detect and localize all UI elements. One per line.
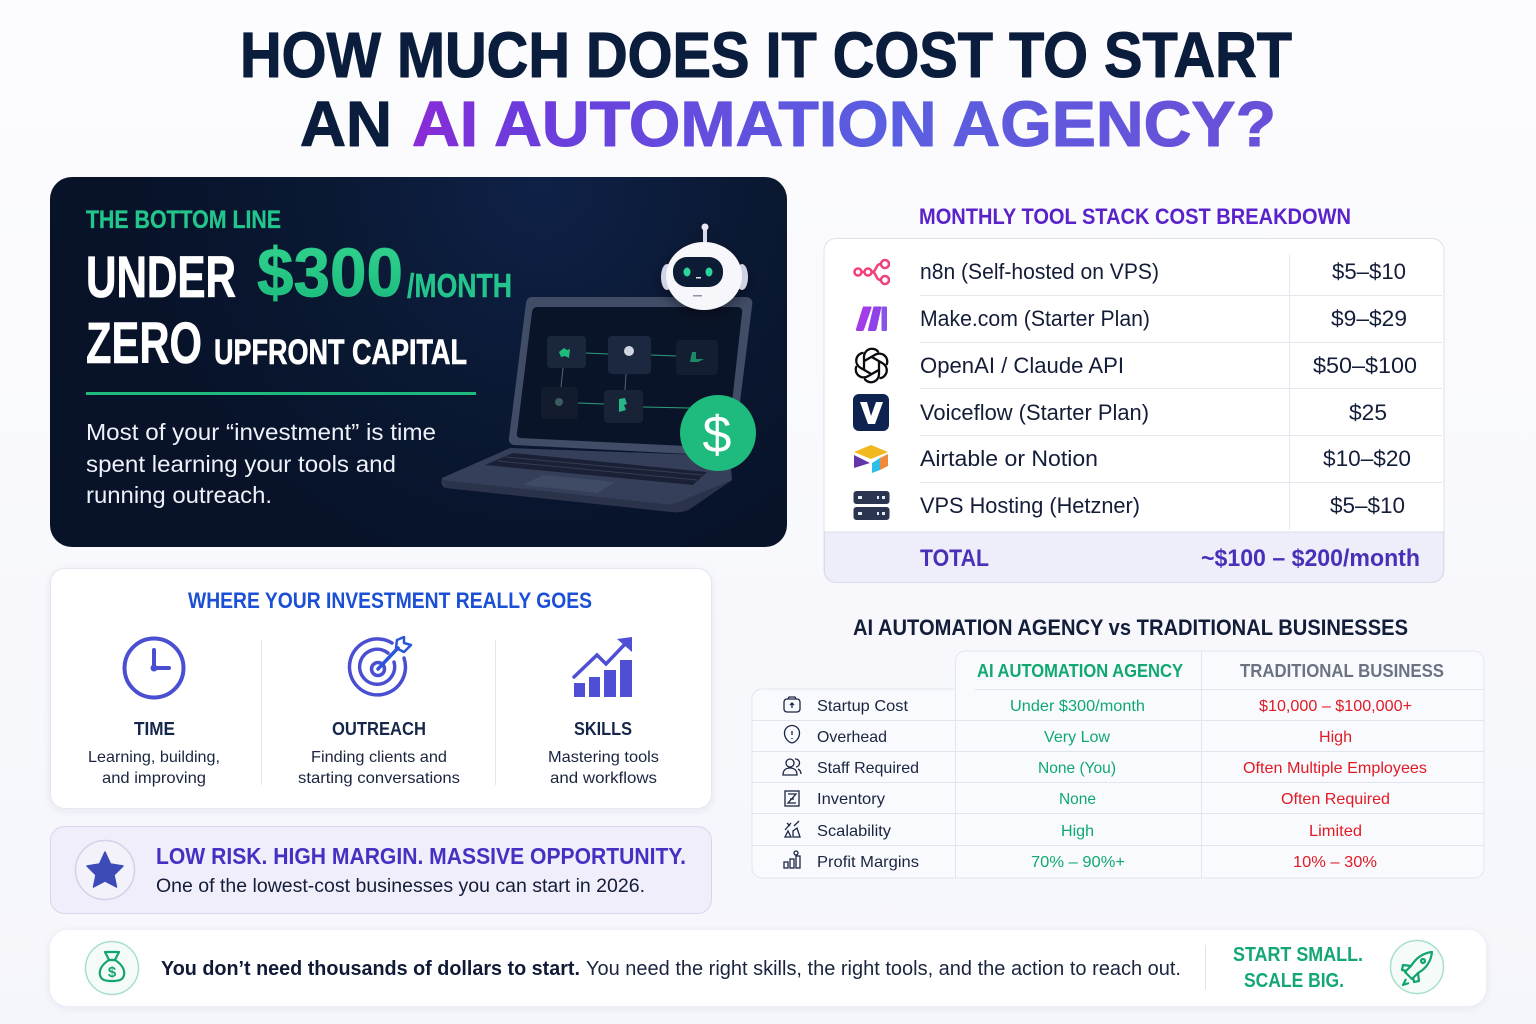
agency values: Under $300/month: [1010, 698, 1145, 715]
column headers: AI AUTOMATION AGENCY: [977, 661, 1183, 681]
column: outreach: Finding clients and: [311, 749, 447, 766]
footer message: You don’t need thousands of dollars to start.: [161, 958, 580, 980]
row: voiceflow: Voiceflow (Starter Plan): [920, 400, 1149, 425]
icon: make: [856, 306, 887, 331]
banner subtext: One of the lowest-cost businesses you can start in 2026.: [156, 876, 645, 897]
traditional values: Often Required: [1281, 791, 1390, 808]
icon: voiceflow: [853, 394, 889, 431]
headline: under $300 per month: $300: [257, 234, 403, 311]
column: skills: [548, 719, 659, 787]
footer tagline: START SMALL.: [1233, 944, 1363, 966]
panel: where your investment really goes: [50, 568, 712, 808]
title: AN: [300, 88, 392, 160]
row: total: [920, 545, 1420, 572]
icon: rocket: [1390, 940, 1444, 994]
row: voiceflow: $25: [1349, 400, 1387, 425]
row: openai: [920, 353, 1417, 378]
headline: under $300 per month: [86, 234, 512, 311]
row: openai: OpenAI / Claude API: [920, 353, 1124, 378]
row: n8n: n8n (Self-hosted on VPS): [920, 259, 1159, 284]
banner heading: LOW RISK. HIGH MARGIN. MASSIVE OPPORTUNITY.: [156, 843, 686, 869]
heading: comparison: AI AUTOMATION AGENCY vs TRADITIONAL BUSINESSES: [853, 615, 1408, 640]
illustration: laptop: [442, 297, 752, 512]
row: voiceflow: [920, 400, 1387, 425]
agency values: 70% – 90%+: [1031, 854, 1125, 871]
title: HOW MUCH DOES IT COST TO START: [240, 19, 1292, 91]
panel: comparison table: [752, 651, 1484, 878]
column: skills: SKILLS: [574, 719, 632, 739]
panel: low risk banner: [50, 826, 712, 914]
row: vps hosting: VPS Hosting (Hetzner): [920, 493, 1140, 518]
footer tagline: [1233, 944, 1363, 992]
row labels: Scalability: [817, 823, 891, 840]
traditional values: High: [1319, 729, 1352, 746]
traditional values: Limited: [1309, 823, 1362, 840]
icon: money bag: [86, 942, 138, 994]
icon: openai: [853, 349, 890, 382]
headline: under $300 per month: /MONTH: [407, 267, 512, 304]
footer message: [161, 958, 1181, 980]
footer message: You need the right skills, the right tools, and the action to reach out.: [586, 958, 1181, 980]
column headers: [977, 661, 1444, 681]
icon: target: [349, 637, 411, 695]
heading: the bottom line: THE BOTTOM LINE: [86, 206, 281, 234]
panel: tool stack table: [824, 238, 1444, 582]
row labels: [817, 698, 919, 871]
icon: airtable: [854, 445, 888, 473]
row: n8n: $5–$10: [1332, 259, 1406, 284]
panel: the bottom line: [50, 177, 787, 547]
comparison row icons: [783, 697, 801, 868]
row: make.com: Make.com (Starter Plan): [920, 306, 1150, 331]
row: n8n: [920, 259, 1406, 284]
row: make.com: $9–$29: [1331, 306, 1407, 331]
column: outreach: [298, 719, 460, 787]
row: openai: $50–$100: [1313, 353, 1417, 378]
column: time: Learning, building,: [88, 749, 220, 766]
icon: robot: [661, 224, 748, 310]
row labels: Profit Margins: [817, 854, 919, 871]
icon: clock: [124, 638, 184, 698]
column: time: and improving: [102, 770, 206, 787]
agency values: [1010, 698, 1145, 871]
row: vps hosting: [920, 493, 1405, 518]
icon: money bag: $: [108, 964, 117, 981]
traditional values: 10% – 30%: [1293, 854, 1377, 871]
column headers: TRADITIONAL BUSINESS: [1240, 661, 1444, 681]
row labels: Staff Required: [817, 760, 919, 777]
row: total: TOTAL: [920, 545, 989, 572]
row: airtable: $10–$20: [1323, 446, 1411, 471]
headline: zero upfront capital: [86, 311, 467, 376]
description text: spent learning your tools and: [86, 451, 396, 477]
workflow nodes on screen: [541, 336, 718, 423]
row: total: ~$100 – $200/month: [1201, 545, 1420, 572]
row labels: Inventory: [817, 791, 885, 808]
row: make.com: [920, 306, 1407, 331]
traditional values: [1243, 698, 1427, 871]
title: AI AUTOMATION AGENCY?: [412, 88, 1276, 160]
agency values: High: [1061, 823, 1094, 840]
row labels: Startup Cost: [817, 698, 909, 715]
traditional values: Often Multiple Employees: [1243, 760, 1427, 777]
icon: n8n: [854, 260, 889, 284]
title: [240, 19, 1292, 160]
icon: star: [76, 840, 134, 900]
column: skills: Mastering tools: [548, 749, 659, 766]
column: outreach: starting conversations: [298, 770, 460, 787]
icon: server: [854, 491, 890, 520]
heading: where your investment really goes: WHERE YOUR INVESTMENT REALLY GOES: [188, 588, 592, 613]
column: outreach: OUTREACH: [332, 719, 426, 739]
column: time: [88, 719, 220, 787]
heading: monthly tool stack: MONTHLY TOOL STACK COST BREAKDOWN: [919, 204, 1351, 229]
column: skills: and workflows: [550, 770, 657, 787]
row: vps hosting: $5–$10: [1330, 493, 1405, 518]
row labels: Overhead: [817, 729, 887, 746]
column: time: TIME: [134, 719, 175, 739]
row: airtable: [920, 446, 1411, 471]
traditional values: $10,000 – $100,000+: [1259, 698, 1412, 715]
agency values: None: [1059, 791, 1096, 808]
row: airtable: Airtable or Notion: [920, 446, 1098, 471]
icon: growth chart: [574, 637, 632, 697]
footer tagline: SCALE BIG.: [1244, 970, 1344, 992]
icon: dollar coin: [680, 395, 756, 471]
icon: dollar coin: $: [703, 406, 732, 464]
description text: Most of your “investment” is time: [86, 419, 436, 445]
agency values: None (You): [1038, 760, 1116, 777]
description text: running outreach.: [86, 482, 272, 508]
agency values: Very Low: [1044, 729, 1110, 746]
headline: under $300 per month: UNDER: [86, 245, 236, 310]
headline: zero upfront capital: ZERO: [86, 311, 202, 376]
headline: zero upfront capital: UPFRONT CAPITAL: [214, 333, 467, 372]
description text: [86, 419, 436, 508]
panel: footer: [50, 930, 1486, 1006]
